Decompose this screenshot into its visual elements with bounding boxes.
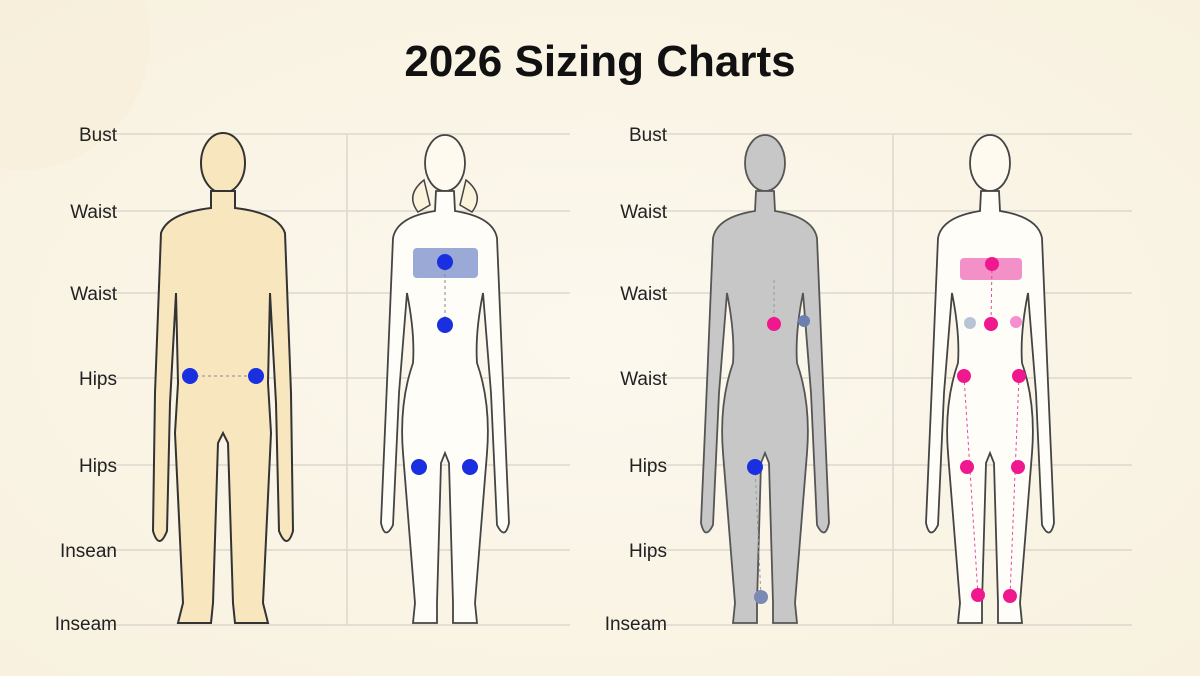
figure 2: female outline [381,135,509,623]
figure 3: grey female [701,135,829,623]
left labels: Waist [70,284,118,305]
right labels: Waist [620,284,668,305]
left labels: Waist [70,202,118,223]
right labels: Inseam [605,614,667,635]
left labels: Bust [79,125,118,146]
left labels: Hips [79,456,117,477]
right labels: Hips [629,456,667,477]
title: 2026 Sizing Charts [404,37,796,86]
left labels: Insean [60,541,117,562]
right labels: Hips [629,541,667,562]
figure 4: female outline pink [926,135,1054,623]
right labels: Waist [620,369,668,390]
left labels [55,125,118,635]
left labels: Inseam [55,614,117,635]
right labels [605,125,668,635]
right labels: Bust [629,125,668,146]
figure 1: male beige [153,133,293,623]
right labels: Waist [620,202,668,223]
left labels: Hips [79,369,117,390]
